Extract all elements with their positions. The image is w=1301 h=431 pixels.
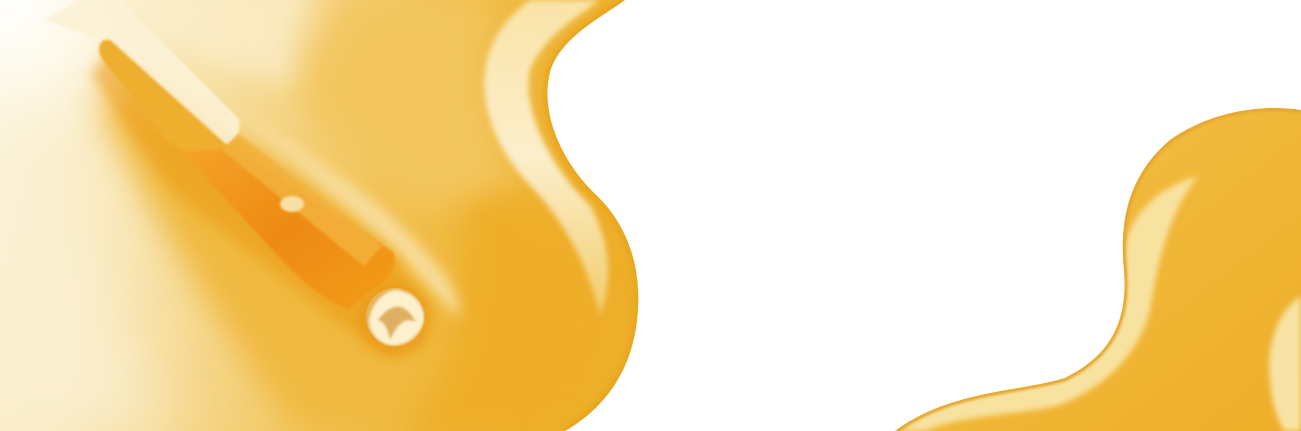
right edge sheen (1269, 296, 1301, 431)
cream band top (157, 0, 326, 95)
droplet body (366, 288, 424, 346)
dropper (45, 0, 425, 355)
white corner wash (0, 0, 116, 122)
small bubble (280, 196, 304, 212)
glow beneath dropper (92, 45, 425, 355)
diagonal sheen beside dropper (263, 128, 466, 320)
right puddle highlight (895, 176, 1198, 431)
cream lower-left wash (23, 231, 180, 431)
top centre gold (300, 0, 520, 210)
deep amber right lobe (407, 192, 548, 431)
amber fill inside upper tube (99, 40, 228, 156)
droplet halo (359, 284, 431, 356)
amber rim (547, 0, 638, 431)
amber band along dropper side (78, 76, 386, 431)
puddle body (0, 0, 660, 431)
right puddle (880, 100, 1301, 431)
left puddle (0, 0, 660, 431)
inner glass rod (222, 134, 382, 266)
droplet glint (369, 290, 424, 345)
right puddle body (880, 100, 1301, 431)
droplet shadow (378, 307, 416, 340)
oil droplet (359, 284, 431, 356)
orange liquid in tube (182, 148, 394, 310)
right puddle rim (895, 108, 1301, 431)
glass stem (45, 0, 240, 146)
highlight along upper right edge (484, 0, 608, 316)
